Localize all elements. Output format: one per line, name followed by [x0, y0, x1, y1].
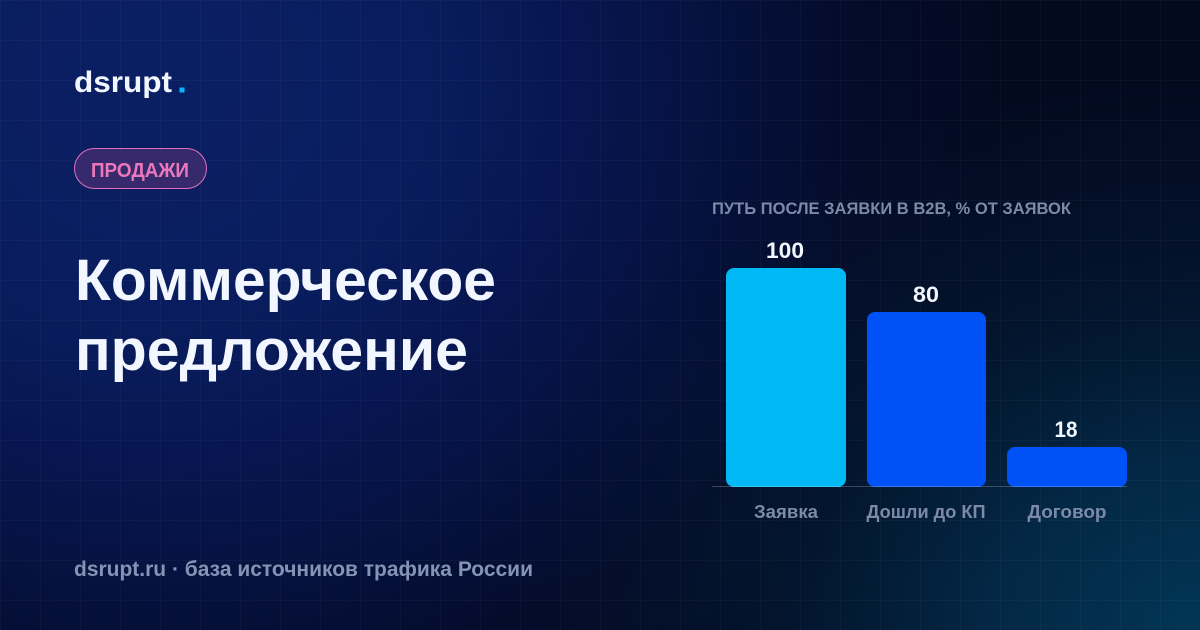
- title: [75, 248, 496, 383]
- logo dot: [180, 88, 184, 92]
- bar: Заявка 100: Заявка: [754, 502, 819, 522]
- bar: Дошли до КП 80: [866, 282, 986, 522]
- title: предложение: [75, 318, 468, 383]
- axis baseline: [712, 486, 1127, 487]
- footer text: dsrupt.ru · база источников трафика России: [74, 558, 533, 581]
- chart title: ПУТЬ ПОСЛЕ ЗАЯВКИ В B2B, % ОТ ЗАЯВОК: [712, 199, 1072, 218]
- badge: category: ПРОДАЖИ: [91, 160, 189, 182]
- bar: Договор 18: [1007, 417, 1127, 522]
- logo: dsrupt: [74, 66, 172, 99]
- bar: Договор 18: 18: [1054, 417, 1078, 442]
- bar: Заявка 100: 100: [766, 238, 804, 263]
- bar: Дошли до КП 80: Дошли до КП: [866, 502, 986, 522]
- title: Коммерческое: [75, 248, 496, 313]
- bar chart: [712, 199, 1127, 522]
- badge: category: [74, 148, 206, 188]
- bar: Договор 18: Договор: [1028, 502, 1106, 522]
- bar: Заявка 100: [726, 238, 846, 522]
- bar: Дошли до КП 80: 80: [913, 282, 939, 307]
